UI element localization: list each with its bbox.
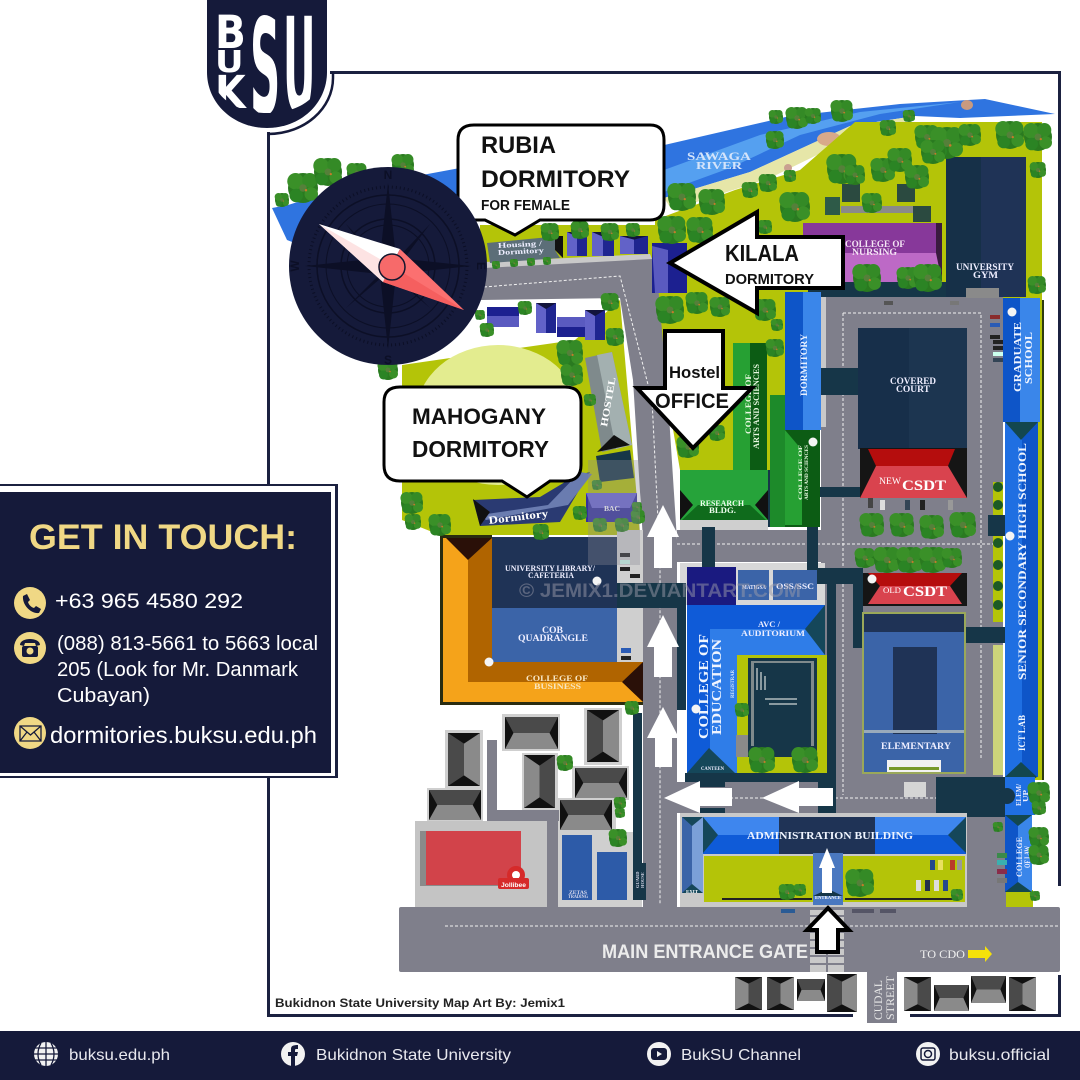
callout: Rubia dormitory: RUBIA: [481, 132, 556, 159]
footer: instagram: [916, 1042, 1050, 1066]
building: university library / cafeteria: UNIVERSITY LIBRARY/: [505, 564, 596, 573]
building: BAC: BAC: [604, 505, 620, 513]
building: graduate school: [1003, 298, 1040, 422]
callout: Rubia dormitory: DORMITORY: [481, 166, 630, 193]
building: college of arts and sciences: ARTS AND SCIENCES: [752, 363, 761, 449]
map credit: Bukidnon State University Map Art By: Jemix1: [275, 996, 565, 1010]
building: college of arts and sciences: COLLEGE OF: [744, 374, 753, 434]
compass: [288, 167, 488, 367]
building: covered court: [858, 328, 967, 449]
callout: Rubia dormitory: [458, 125, 664, 235]
callout: Mahogany dormitory: [384, 387, 581, 497]
building: hostel: [585, 352, 634, 482]
building: college of law and ELEM/UP: COLLEGE: [1015, 837, 1024, 877]
building: senior secondary high school and ICT lab: [1005, 422, 1038, 787]
footer: facebook: Bukidnon State University: [316, 1047, 511, 1064]
contact: email: dormitories.buksu.edu.ph: [50, 722, 317, 748]
building: covered court: COURT: [896, 384, 930, 394]
building: college of business: [440, 535, 643, 705]
building: mahogany dormitory roof: Dormitory: [488, 508, 550, 527]
trees: [275, 100, 1052, 901]
building: new CSDT: NEW: [879, 476, 902, 486]
campus grounds: [402, 122, 1044, 907]
road labels: CUDAL: [871, 980, 885, 1020]
road arrows: [647, 505, 835, 893]
building: BAC: [586, 493, 637, 522]
building: COB quadrangle: QUADRANGLE: [518, 633, 588, 643]
footer: youtube: [647, 1042, 801, 1066]
building: university library / cafeteria: CAFETERIA: [528, 571, 574, 580]
building: graduate school: SCHOOL: [1023, 332, 1035, 384]
contact: email: [14, 717, 317, 749]
arrow callout: Kilala dormitory: KILALA: [725, 240, 799, 266]
compass: W: [288, 260, 302, 272]
parked cars: [781, 301, 1007, 913]
building: covered court: COVERED: [890, 376, 936, 386]
contact: mobile phone: +63 965 4580 292: [55, 590, 243, 613]
building: research bldg: [680, 470, 768, 520]
compass: S: [384, 353, 392, 367]
watermark: [519, 460, 801, 602]
compass: E: [474, 262, 488, 270]
building: college of business: COLLEGE OF: [526, 673, 588, 683]
road labels: STREET: [883, 975, 897, 1020]
building: administration building and front lawn: [680, 813, 967, 907]
building: university gym: [946, 157, 1026, 298]
building: college of business: BUSINESS: [534, 681, 581, 691]
building: research bldg: BLDG.: [709, 506, 736, 515]
building: graduate school: GRADUATE: [1012, 322, 1024, 392]
road labels: MAIN ENTRANCE GATE: [602, 942, 808, 963]
building: COB quadrangle: COB: [542, 625, 563, 635]
jollibee logo: [498, 866, 529, 889]
kilala dormitory building and dorm roofs: [487, 232, 687, 340]
building: administration building and front lawn: EXIT: [686, 889, 698, 894]
building: matigsa and OSS/SSC: OSS/SSC: [776, 581, 814, 591]
footer: website: [34, 1042, 170, 1066]
housing / dormitory sign: Housing /: [498, 239, 543, 250]
contact: landline: Cubayan): [57, 685, 150, 707]
BukSU logo: U: [215, 43, 244, 79]
building: old CSDT: OLD: [883, 586, 901, 595]
library parking: [617, 530, 643, 662]
housing / dormitory sign: [487, 236, 563, 263]
neighbouring houses and Jollibee block: GUARD: [635, 871, 640, 888]
building: college of arts and sciences: [733, 343, 820, 527]
building: college of arts and sciences: ARTS AND SCIENCES: [805, 445, 810, 500]
building: college of nursing: COLLEGE OF: [845, 239, 906, 249]
building: college of education and AVC auditorium: AUDITORIUM: [741, 628, 805, 638]
neighbouring houses and Jollibee block: TRADING: [568, 895, 588, 900]
road labels: [602, 942, 992, 1020]
neighbouring houses and Jollibee block: [415, 708, 646, 907]
housing / dormitory sign: Dormitory: [498, 246, 544, 257]
building: administration building and front lawn: ENTRANCE: [815, 895, 841, 900]
building: college of law and ELEM/UP: OF LAW: [1023, 846, 1032, 868]
building: COB quadrangle: [492, 608, 617, 662]
building: elementary: [862, 612, 966, 797]
building: matigsa and OSS/SSC: MATIGSA: [742, 585, 767, 591]
building: college of law and ELEM/UP: UP: [1022, 789, 1030, 802]
building: research bldg: RESEARCH: [700, 499, 745, 508]
river: Sawaga River: [272, 99, 1055, 245]
building: old CSDT: CSDT: [903, 584, 947, 600]
building: college of education and AVC auditorium: COLLEGE OF: [697, 634, 712, 739]
road labels: TO CDO: [920, 947, 965, 961]
building: college of nursing: NURSING: [852, 247, 897, 257]
arrow callout: Kilala dormitory: DORMITORY: [725, 271, 814, 288]
walkways: [617, 282, 1005, 817]
building: college of arts and sciences: COLLEGE OF: [799, 445, 804, 500]
building: new CSDT: [860, 448, 967, 498]
building: hostel: HOSTEL: [599, 376, 619, 428]
building: college of education and AVC auditorium: CANTEEN: [701, 766, 724, 772]
neighbouring houses and Jollibee block: ZETAS: [569, 891, 587, 896]
building: college of law and ELEM/UP: ELEM/: [1015, 783, 1023, 806]
building: new CSDT: CSDT: [902, 478, 946, 494]
BukSU logo: K: [215, 67, 248, 119]
building locator dots: [484, 308, 1016, 714]
compass needle: [319, 224, 464, 310]
arrow callout: hostel office: Hostel: [669, 363, 720, 382]
campus map: [272, 99, 1060, 1023]
footer: instagram: buksu.official: [949, 1047, 1050, 1064]
entrance arrow: [807, 908, 849, 952]
roads: [399, 254, 1060, 1023]
callout: Rubia dormitory: FOR FEMALE: [481, 198, 570, 214]
contact panel: [0, 484, 338, 778]
river: Sawaga River: SAWAGA: [687, 149, 751, 163]
building: administration building and front lawn: ADMINISTRATION BUILDING: [747, 830, 913, 842]
footer: website: buksu.edu.ph: [69, 1047, 170, 1064]
houses south of main road: [735, 974, 1036, 1012]
footer: youtube: BukSU Channel: [681, 1047, 801, 1064]
BukSU logo: [207, 0, 333, 145]
BukSU logo: B: [215, 7, 246, 60]
contact: mobile phone: [14, 587, 243, 619]
building: university library / cafeteria: [492, 537, 617, 608]
building: college of education and AVC auditorium: EDUCATION: [710, 639, 725, 735]
building: mahogany dormitory roof: [473, 472, 592, 527]
small buildings north: [825, 184, 931, 222]
building: university gym: GYM: [973, 270, 999, 280]
building: college of education and AVC auditorium: AVC /: [758, 619, 781, 629]
jollibee logo: Jollibee: [501, 882, 526, 889]
building: college of nursing: [803, 223, 942, 282]
callout: Mahogany dormitory: DORMITORY: [412, 436, 549, 462]
building: college of education and AVC auditorium: [687, 605, 827, 773]
building: dormitory east: DORMITORY: [799, 333, 809, 396]
building: elementary: ELEMENTARY: [881, 742, 951, 752]
arrow callout: hostel office: [637, 331, 752, 448]
arrow callout: Kilala dormitory: [670, 212, 843, 313]
building: college of education and AVC auditorium: REGISTRAR: [731, 670, 736, 698]
building: matigsa and OSS/SSC: [687, 567, 817, 605]
building: senior secondary high school and ICT lab: ICT LAB: [1017, 715, 1027, 751]
compass: N: [384, 168, 392, 182]
building: university gym: UNIVERSITY: [956, 262, 1015, 272]
contact: landline: [14, 632, 318, 707]
contact heading: GET IN TOUCH:: [29, 517, 297, 557]
building: old CSDT: [863, 573, 967, 606]
footer bar: [0, 1031, 1080, 1080]
contact: landline: 205 (Look for Mr. Danmark: [57, 659, 299, 681]
footer: facebook: [281, 1042, 511, 1066]
building: college of law and ELEM/UP: [999, 777, 1035, 892]
building: dormitory east: [785, 292, 821, 430]
watermark: © JEMIX1.DEVIANTART.COM: [519, 581, 801, 602]
neighbouring houses and Jollibee block: HOUSE: [640, 872, 645, 888]
building: senior secondary high school and ICT lab: SENIOR SECONDARY HIGH SCHOOL: [1015, 443, 1029, 680]
arrow callout: hostel office: OFFICE: [655, 390, 729, 413]
callout: Mahogany dormitory: MAHOGANY: [412, 404, 546, 429]
river: Sawaga River: RIVER: [696, 160, 743, 172]
map frame: [267, 71, 1061, 1017]
contact: landline: (088) 813-5661 to 5663 local: [57, 633, 318, 655]
